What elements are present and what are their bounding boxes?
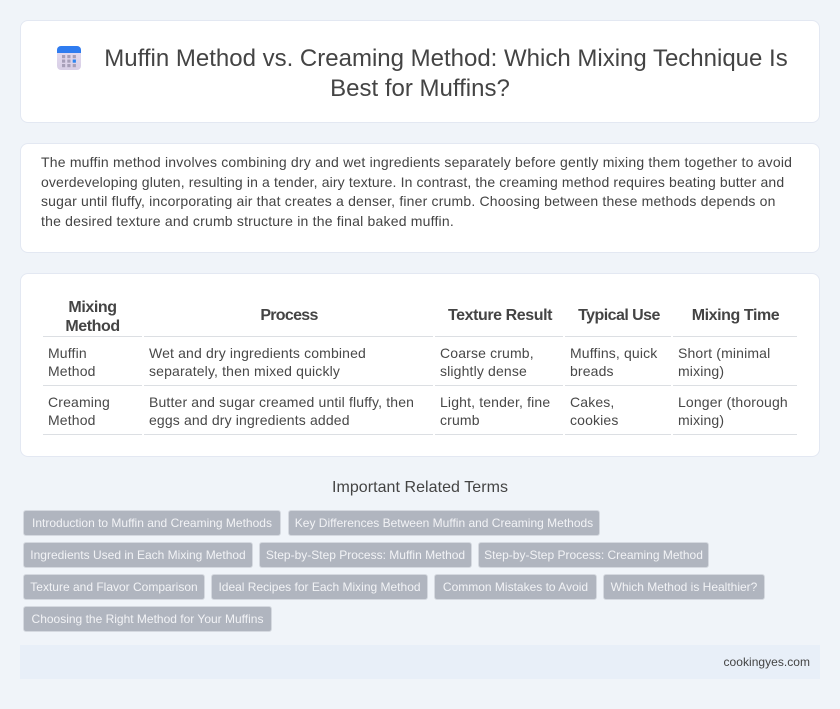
tag: Ingredients Used in Each Mixing Method <box>30 548 246 562</box>
tag <box>23 606 272 632</box>
tag <box>288 510 600 536</box>
table: mixing method comparison: Longer (thorough <box>678 394 788 410</box>
tag <box>211 574 428 600</box>
intro paragraph: sugar until fluffy, incorporating air that creates a denser, finer crumb. Choosing between these methods depends on <box>41 193 776 209</box>
table: mixing method comparison: Typical Use <box>578 307 660 324</box>
tag <box>434 574 597 600</box>
table: mixing method comparison: Butter and sugar creamed until fluffy, then <box>149 394 414 410</box>
table: mixing method comparison: mixing) <box>678 412 724 428</box>
table: mixing method comparison: Method <box>65 318 120 335</box>
panel: comparison table <box>20 273 820 457</box>
heading: related terms: Important Related Terms <box>332 479 508 496</box>
tag: Key Differences Between Muffin and Creaming Methods <box>295 516 593 530</box>
table: mixing method comparison: Mixing Time <box>692 307 779 324</box>
title: Muffin Method vs. Creaming Method: Which Mixing Technique Is <box>104 45 788 72</box>
table: mixing method comparison: Process <box>260 307 318 324</box>
table: mixing method comparison: crumb <box>440 412 480 428</box>
tag <box>603 574 765 600</box>
table: mixing method comparison: Texture Result <box>448 307 552 324</box>
tag: Step-by-Step Process: Muffin Method <box>266 548 465 562</box>
table: mixing method comparison: Creaming <box>48 394 110 410</box>
table: mixing method comparison: cookies <box>570 412 619 428</box>
table: mixing method comparison: Coarse crumb, <box>440 345 534 361</box>
title: Best for Muffins? <box>330 75 510 102</box>
table: mixing method comparison: Light, tender, fine <box>440 394 550 410</box>
tag <box>259 542 472 568</box>
intro paragraph: overdeveloping gluten, resulting in a tender, airy texture. In contrast, the creaming method requires beating butter and <box>41 174 784 190</box>
table: mixing method comparison: Muffin <box>48 345 87 361</box>
tag list: related terms <box>23 510 765 632</box>
table: mixing method comparison: Short (minimal <box>678 345 770 361</box>
tag <box>478 542 709 568</box>
table: mixing method comparison <box>43 299 797 435</box>
intro paragraph: the desired texture and crumb structure in the final baked muffin. <box>41 212 454 228</box>
intro paragraph: The muffin method involves combining dry and wet ingredients separately before gently mixing them together to avoid <box>41 154 792 170</box>
table: mixing method comparison: eggs and dry ingredients added <box>149 412 350 428</box>
tag: Step-by-Step Process: Creaming Method <box>484 548 703 562</box>
footer <box>20 645 820 679</box>
tag <box>23 542 253 568</box>
panel: title card <box>20 20 820 123</box>
table: mixing method comparison: Mixing <box>68 299 117 316</box>
tag: Common Mistakes to Avoid <box>443 580 588 594</box>
footer: site name: cookingyes.com <box>724 655 810 669</box>
tag: Introduction to Muffin and Creaming Methods <box>32 516 272 530</box>
tag: Choosing the Right Method for Your Muffins <box>32 612 263 626</box>
icon: calendar <box>57 46 81 70</box>
table: mixing method comparison: Muffins, quick <box>570 345 657 361</box>
title <box>104 45 788 102</box>
table: mixing method comparison: Wet and dry ingredients combined <box>149 345 366 361</box>
intro paragraph <box>41 154 792 228</box>
tag: Texture and Flavor Comparison <box>30 580 198 594</box>
table: mixing method comparison: separately, then mixed quickly <box>149 363 340 379</box>
table: mixing method comparison: Cakes, <box>570 394 614 410</box>
panel: intro text <box>20 143 820 253</box>
table: mixing method comparison: slightly dense <box>440 363 527 379</box>
table: mixing method comparison: Method <box>48 412 96 428</box>
tag: Which Method is Healthier? <box>611 580 757 594</box>
table: mixing method comparison: mixing) <box>678 363 724 379</box>
tag <box>23 574 205 600</box>
table: mixing method comparison: Method <box>48 363 96 379</box>
tag <box>23 510 281 536</box>
tag: Ideal Recipes for Each Mixing Method <box>218 580 421 594</box>
table: mixing method comparison: breads <box>570 363 614 379</box>
